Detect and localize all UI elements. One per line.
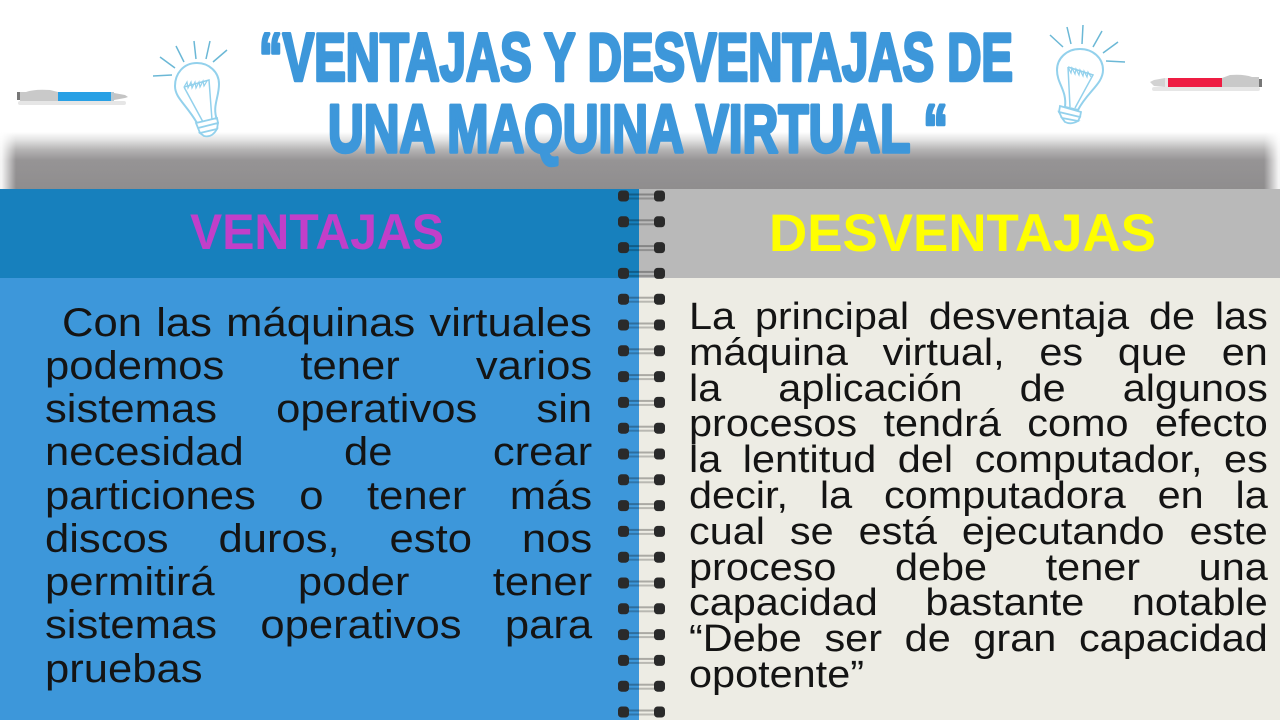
title [259,20,1013,168]
text block: ventajas: Con las máquinas virtuales [62,300,592,344]
heading: desventajas [639,189,1280,278]
text block: desventajas: cual se está ejecutando este [689,510,1268,552]
text block: ventajas: discos duros, esto nos [45,516,592,560]
shadow band under the header [0,132,1280,189]
text block: ventajas: podemos tener varios [45,344,592,388]
text block: desventajas: proceso debe tener una [689,546,1268,588]
text block: desventajas: La principal desventaja de las [689,296,1268,338]
text block: desventajas: decir, la computadora en la [689,474,1268,516]
text block: desventajas: la aplicación de algunos [689,368,1268,410]
heading: desventajas: DESVENTAJAS [769,204,1156,263]
text block: desventajas: “Debe ser de gran capacidad [689,618,1268,660]
icon: red pen [1150,74,1262,91]
spiral binding [618,190,665,718]
text block: desventajas: máquina virtual, es que en [689,332,1268,374]
title: UNA MAQUINA VIRTUAL “ [328,91,948,167]
text block: desventajas: opotente” [689,654,864,696]
heading: ventajas [0,189,639,278]
text block: ventajas: permitirá poder tener [45,560,592,604]
text block: ventajas: sistemas operativos para [45,602,592,646]
icon: blue pen [17,90,128,105]
panel: ventajas [0,189,639,720]
text block: desventajas: capacidad bastante notable [689,582,1268,624]
text block: desventajas [689,296,1268,696]
text block: ventajas: necesidad de crear [45,430,592,474]
text block: ventajas: particiones o tener más [45,474,592,518]
text block: desventajas: la lentitud del computador, es [689,438,1268,480]
text block: ventajas: sistemas operativos sin [45,386,592,430]
icon: left light bulb [153,40,228,138]
heading: ventajas: VENTAJAS [190,204,444,260]
text block: ventajas [45,300,592,690]
text block: ventajas: pruebas [45,646,203,690]
icon: right light bulb [1050,25,1125,124]
panel: desventajas [639,189,1280,720]
text block: desventajas: procesos tendrá como efecto [689,402,1268,444]
